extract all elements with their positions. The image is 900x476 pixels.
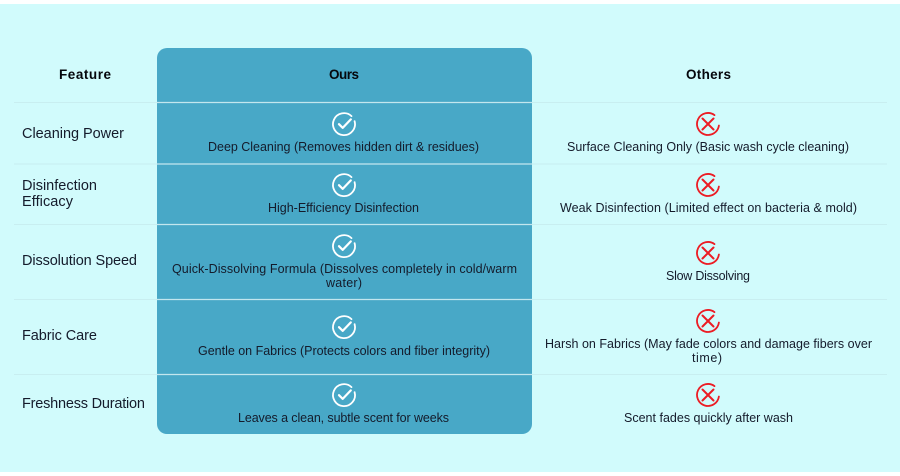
icon: cross 1 xyxy=(697,113,719,135)
icon: check 2 xyxy=(333,174,355,196)
others: dissolution: Slow Dissolving xyxy=(666,269,750,283)
ours: fabric: Gentle on Fabrics (Protects colors and fiber integrity) xyxy=(198,344,490,358)
others: cleaning: Surface Cleaning Only (Basic wash cycle cleaning) xyxy=(567,140,849,154)
ours: cleaning: Deep Cleaning (Removes hidden dirt & residues) xyxy=(208,140,479,154)
icon: check 5 xyxy=(333,384,355,406)
feature: disinfection efficacy xyxy=(22,178,97,210)
others: freshness: Scent fades quickly after wash xyxy=(624,411,793,425)
panel: ours column xyxy=(157,48,532,434)
feature: cleaning power: Cleaning Power xyxy=(22,126,124,142)
heading: others: Others xyxy=(686,67,731,82)
feature: freshness duration: Freshness Duration xyxy=(22,396,145,412)
icon: cross 5 xyxy=(697,384,719,406)
heading: feature: Feature xyxy=(59,67,111,82)
others: fabric: Harsh on Fabrics (May fade colors and damage fibers over xyxy=(545,337,872,351)
icon: cross 4 xyxy=(697,310,719,332)
ours: dissolution: water) xyxy=(325,276,362,290)
feature: dissolution speed: Dissolution Speed xyxy=(22,253,137,269)
feature: disinfection efficacy: Disinfection xyxy=(22,178,97,194)
icon: check 4 xyxy=(333,316,355,338)
ours: freshness: Leaves a clean, subtle scent for weeks xyxy=(238,411,449,425)
ours: dissolution: Quick-Dissolving Formula (Dissolves completely in cold/warm xyxy=(172,262,517,276)
others: disinfection: Weak Disinfection (Limited effect on bacteria & mold) xyxy=(560,201,857,215)
icon: check 3 xyxy=(333,235,355,257)
panel row separators xyxy=(157,102,532,374)
others: fabric: time) xyxy=(692,351,722,365)
feature: fabric care: Fabric Care xyxy=(22,328,97,344)
heading: ours: Ours xyxy=(329,67,359,82)
ours: dissolution xyxy=(172,262,517,290)
icon: cross 2 xyxy=(697,174,719,196)
ours: disinfection: High-Efficiency Disinfection xyxy=(268,201,419,215)
icon: cross 3 xyxy=(697,242,719,264)
feature: disinfection efficacy: Efficacy xyxy=(22,194,74,210)
row dividers xyxy=(14,102,887,374)
icon: check 1 xyxy=(333,113,355,135)
others: fabric xyxy=(545,337,872,365)
